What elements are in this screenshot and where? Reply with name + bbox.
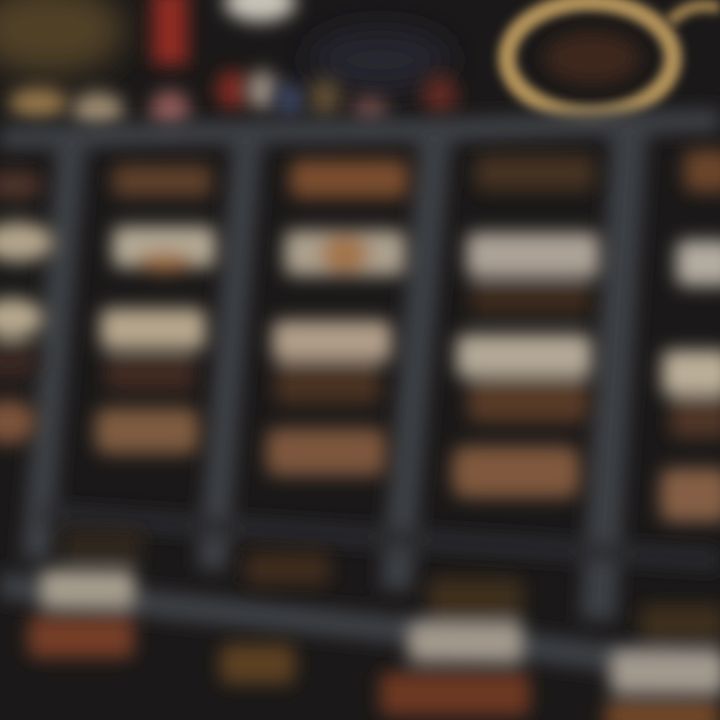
reel column 3 symbols (220, 160, 408, 684)
reel frame: grey bars (0, 120, 720, 672)
reel column 2 symbols (28, 165, 216, 658)
reel column 1 symbols (0, 171, 54, 444)
top background lights (0, 0, 458, 130)
icon: gold ring (507, 2, 720, 114)
reel column 5 symbols (605, 150, 720, 720)
reel column 4 symbols (380, 155, 600, 716)
